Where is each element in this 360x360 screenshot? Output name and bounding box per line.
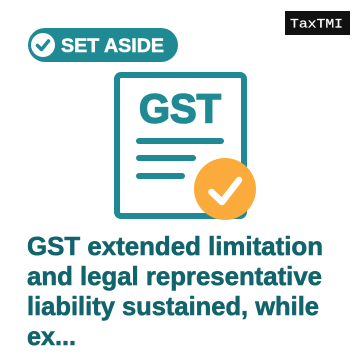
title: and legal representative (27, 261, 322, 291)
document outline (117, 75, 244, 216)
document heading: GST: GST (139, 86, 221, 132)
status badge: set aside: SET ASIDE (61, 36, 164, 57)
icon: check circle (31, 33, 55, 57)
title: GST extended limitation (27, 231, 323, 261)
title: ex... (27, 321, 76, 351)
title: liability sustained, while (27, 291, 319, 321)
title (27, 231, 323, 351)
document text lines (139, 141, 221, 176)
status badge: set aside (28, 28, 178, 62)
orange check badge (194, 158, 256, 220)
icon: GST document with check badge (117, 75, 256, 220)
logo: TaxTMI: TaxTMI (290, 16, 343, 32)
logo: TaxTMI (285, 11, 350, 35)
